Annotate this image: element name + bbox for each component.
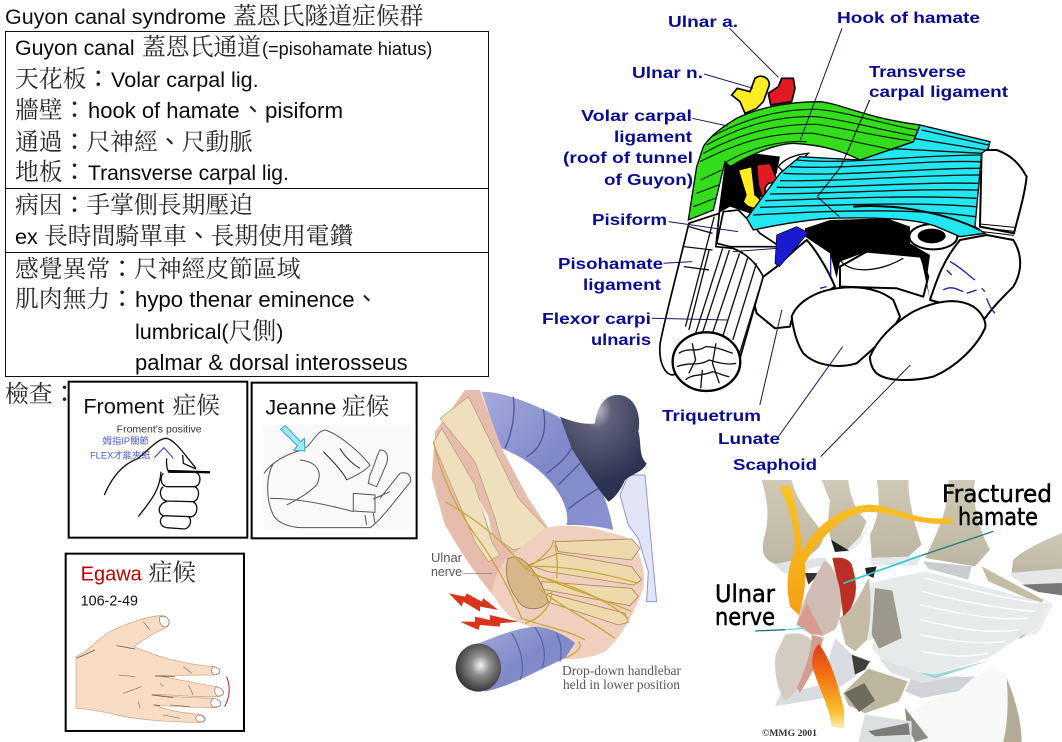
icon: red lightning bolts	[449, 593, 518, 630]
anatomy labels: ulnaris	[591, 332, 651, 349]
carpal bones	[506, 557, 548, 609]
anatomy labels: Scaphoid	[733, 457, 817, 474]
gap between bones	[478, 498, 493, 540]
caption: handlebar position: Drop-down handlebar	[562, 664, 681, 679]
hook of hamate white	[778, 153, 808, 172]
anatomy labels: Pisohamate	[558, 256, 663, 273]
hamate body	[839, 578, 871, 652]
text block: anatomy: hook of hamate	[88, 98, 240, 123]
white carpal highlights	[773, 521, 1062, 595]
anatomy labels: ligament	[583, 277, 662, 294]
anatomy labels: Transverse	[869, 64, 966, 81]
anatomy labels: of Guyon)	[604, 172, 693, 189]
flexor carpi ulnaris tendon	[660, 213, 763, 391]
text block: symptoms: 、	[355, 279, 378, 314]
anatomy labels: ligament	[614, 129, 693, 146]
caption: Froment's positive: Froment's positive	[117, 424, 202, 435]
volar carpal ligament	[688, 102, 920, 220]
annotation: thumb IP flex: 姆指IP關節	[103, 435, 149, 446]
copyright: ©MMG 2001	[762, 728, 818, 738]
panel: Froment sign	[69, 382, 247, 538]
illustration background	[263, 425, 412, 529]
panel: Egawa sign	[66, 553, 244, 731]
icon: red movement arrow	[225, 677, 229, 707]
anatomy labels: Ulnar n.	[632, 65, 703, 82]
title: Guyon canal syndrome	[5, 5, 226, 29]
heading: Egawa: Egawa	[81, 563, 143, 585]
caption: handlebar position	[562, 664, 681, 693]
anatomy labels: (roof of tunnel	[563, 150, 693, 167]
handlebar upper tube	[482, 392, 613, 530]
text block: anatomy: 天花板：	[15, 59, 110, 94]
heading: Froment: Froment	[83, 394, 164, 419]
anatomy labels: Flexor carpi	[542, 311, 651, 328]
handlebar lower tube	[475, 627, 575, 692]
text block: symptoms: 感覺異常：尺神經皮節區域	[15, 249, 301, 284]
lower nerve	[812, 644, 844, 729]
icon: hand with spread fingers	[76, 616, 224, 722]
brake hood	[560, 395, 647, 502]
diagram: fractured hamate	[715, 480, 1062, 742]
pisiform	[717, 210, 780, 247]
annotation: thumb IP flex: FLEX才能夾紙	[90, 449, 151, 460]
panel: Jeanne sign	[252, 383, 417, 538]
anatomy labels: carpal ligament	[869, 84, 1009, 101]
metacarpal bones	[528, 539, 642, 625]
transverse carpal ligament	[747, 125, 990, 237]
bones	[753, 150, 1027, 380]
text block: anatomy: 蓋恩氏通道	[142, 28, 261, 62]
text block: symptoms: hypo thenar eminence	[135, 287, 355, 312]
ulnar nerve in tunnel	[738, 167, 761, 208]
handlebar end cap	[456, 644, 501, 692]
lateral white edge	[1018, 598, 1053, 640]
icon: hand outline	[264, 430, 411, 528]
transverse carpal ligament	[872, 571, 1052, 683]
anatomy labels: Lunate	[718, 431, 780, 448]
panel: Guyon canal summary table	[5, 28, 489, 376]
label: Fractured hamate: hamate	[958, 503, 1038, 531]
eye opening	[909, 224, 957, 249]
text block: cause: ex	[15, 224, 38, 249]
heading: Jeanne: Jeanne	[265, 394, 336, 419]
text block: anatomy: Transverse carpal lig.	[88, 162, 289, 185]
diagram: tunnel of Guyon anatomy	[542, 10, 1027, 474]
lower tissue	[775, 633, 813, 701]
text block: symptoms: lumbrical(尺側)	[135, 312, 283, 346]
anatomy labels: Triquetrum	[662, 408, 761, 425]
pisohamate ligament	[775, 227, 808, 267]
text block: anatomy: pisiform	[265, 98, 343, 123]
heading: Jeanne: 症候	[342, 387, 389, 421]
hamate illustration	[755, 480, 1062, 742]
lower wrist bones	[775, 638, 975, 742]
text block: cause: 長時間騎單車	[44, 217, 187, 251]
label: Ulnar nerve: nerve	[715, 603, 775, 631]
ulnar artery in tunnel	[757, 163, 780, 200]
text block: symptoms: palmar & dorsal interosseus	[135, 350, 408, 375]
annotation: thumb IP flex	[90, 435, 173, 460]
forearm bones	[433, 397, 553, 562]
diagram: cycling compression of ulnar nerve	[431, 390, 681, 693]
label: Fractured hamate	[942, 480, 1052, 531]
black tunnel shadow	[805, 218, 930, 300]
ulnar nerve and artery entering	[732, 76, 795, 113]
callout lines	[755, 531, 993, 631]
anatomy labels	[542, 10, 1009, 474]
label: Fractured hamate: Fractured	[942, 480, 1052, 508]
text block: anatomy: Volar carpal lig.	[111, 67, 259, 92]
text block: anatomy	[15, 28, 432, 187]
heading: Egawa: 症候	[149, 553, 196, 587]
icon: hand pinching paper	[104, 438, 210, 529]
text: exam reference: 106-2-49	[81, 594, 138, 610]
leader lines	[652, 28, 910, 457]
label: Ulnar nerve: nerve	[431, 564, 462, 579]
text block: cause	[15, 185, 355, 251]
text block: anatomy: 地板：	[15, 152, 86, 187]
label: Ulnar nerve	[715, 580, 775, 631]
label: Ulnar nerve	[431, 550, 463, 579]
anatomy labels: Volar carpal	[581, 108, 692, 125]
ulnar nerve	[779, 486, 952, 615]
heading: Froment: 症候	[173, 387, 220, 421]
fractured hamate	[832, 558, 856, 616]
anatomy labels: Pisiform	[592, 212, 667, 229]
label: Ulnar nerve: Ulnar	[431, 550, 463, 565]
hypothenar tissue	[797, 561, 841, 636]
heading: examination: 檢查：	[5, 374, 76, 409]
text block: cause: 病因：手掌側長期壓迫	[15, 185, 253, 220]
text block: anatomy: Guyon canal	[15, 36, 135, 60]
text block: anatomy: (=pisohamate hiatus)	[262, 39, 432, 59]
forearm	[432, 390, 548, 620]
hand	[492, 526, 644, 659]
text block: anatomy: 牆壁：	[15, 90, 86, 125]
text block: anatomy: 、	[241, 90, 265, 125]
brake lever	[620, 475, 657, 602]
black tunnel top	[718, 153, 780, 213]
anatomy labels: Hook of hamate	[837, 10, 980, 27]
text block: symptoms	[15, 249, 408, 375]
text block: cause: 、長期使用電鑽	[187, 216, 353, 251]
metacarpal bones	[762, 480, 1062, 742]
icon: cyan arrow	[281, 426, 305, 451]
caption: handlebar position: held in lower position	[563, 678, 680, 693]
anatomy labels: Ulnar a.	[668, 14, 738, 31]
text block: anatomy: 通過：尺神經、尺動脈	[15, 122, 253, 157]
ulnar nerve branches	[433, 442, 638, 658]
label: Ulnar nerve: Ulnar	[715, 580, 775, 608]
text block: symptoms: 肌肉無力：	[15, 279, 134, 314]
